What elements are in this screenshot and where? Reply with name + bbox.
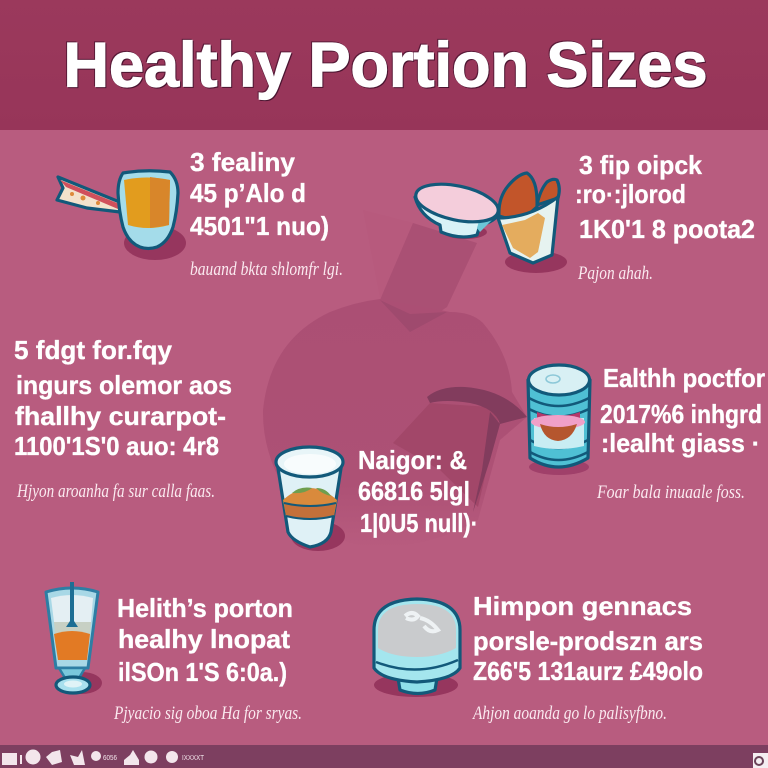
footer labels: IXXXXT [182,755,205,762]
text block: 3 fealіny [190,147,296,177]
panel: item 6 [46,582,302,724]
panel: item 3 text: 1100'1S'0 auo: 4r8 [14,431,219,461]
text block [190,147,343,280]
footer labels [103,755,205,762]
icon: stacked container [528,365,590,475]
panel: item 1 [57,147,343,280]
text block: Himpon gennacs [473,591,692,621]
text block: healhy lnopat [118,624,290,654]
panel: item 2 [412,150,755,284]
icon: lidded tub [374,599,460,697]
text block: Pajon ahah. [577,263,653,284]
footer labels: 6056 [103,755,117,762]
panel: item 4 [276,445,478,551]
footer icons [2,750,178,765]
text block: porsle-prodszn ars [473,626,703,656]
text block [471,591,703,724]
text block: 66816 5lg| [358,476,470,506]
text block: Z66'5 131aurz £49olo [473,656,703,686]
text block: :lealht giass · [601,428,760,458]
panel: item 3 text: fhallhy curarpot- [15,401,226,431]
text block [575,150,755,284]
text block [596,363,765,503]
header band [0,0,768,130]
text block: Ahjon aoanda go lo palisyfbno. [471,703,667,724]
panel: item 3 text: ingurs olemor aos [16,370,232,400]
text block [113,593,302,724]
panel: item 3 text: 5 fdgt for.fqy [14,335,173,365]
text block: 1|0U5 null)· [360,508,478,538]
text block: bauand bkta shlomfr lgi. [190,259,343,280]
panel: item 3 text: Hjyon aroanha fa sur calla faas. [16,481,215,502]
text block: Pjyacio sig oboa Ha for sryas. [113,703,302,724]
text block: 45 p’Alo d [190,178,306,208]
icon: glass with food [276,447,345,551]
footer bar [0,745,768,768]
panel: item 5 [528,363,765,503]
text block: 4501"1 nuo) [190,211,329,241]
title: Healthy Portion Sizes [64,30,708,100]
text block: 1K0'1 8 poota2 [579,214,755,244]
icon: sandwich and cup [57,171,186,260]
text block [358,445,478,538]
icon: bowl and snack cup [412,173,567,273]
text block: Naigor: & [358,445,467,475]
text block: :ro·:jlorod [575,179,686,209]
icon: corner badge [753,753,768,768]
text block: 3 fip oipck [579,150,703,180]
icon: tall glass with straw [46,582,102,694]
central beet silhouette [263,210,527,548]
panel: item 3 text [14,335,232,502]
text block: Helith’s porton [117,593,293,623]
panel: item 7 [374,591,703,724]
text block: ilSOn 1'S 6:0a.) [118,657,287,687]
